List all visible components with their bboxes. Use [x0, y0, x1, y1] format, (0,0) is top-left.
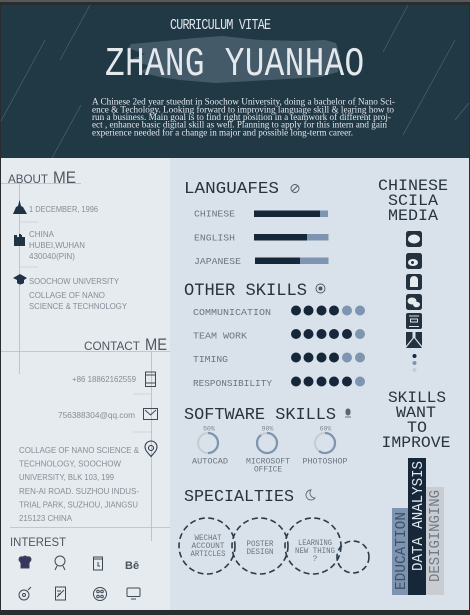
heading: languages: LANGUAFES [184, 180, 279, 199]
contact details: 756388304@qq.com [58, 410, 135, 420]
about me details: HUBEI,WUHAN [29, 240, 85, 250]
language labels [194, 208, 241, 267]
icon: film reel [94, 588, 106, 600]
about me details: COLLAGE OF NANO [29, 290, 105, 300]
percent labels: 90% [262, 426, 273, 432]
language labels: JAPANESE [194, 256, 241, 267]
percent labels: 50% [203, 426, 215, 432]
section: skills want to improve [382, 389, 450, 595]
software labels: OFFICE [254, 464, 282, 474]
heading: interest: INTEREST [10, 537, 66, 549]
bar: data analysis: DATA ANALYSIS [410, 461, 427, 571]
section: chinese social media [378, 177, 448, 372]
icon: momo [406, 231, 422, 247]
heading: chinese social media: SCILA [388, 192, 438, 210]
icon: renren [406, 332, 422, 348]
icon: qq penguin [406, 274, 422, 290]
heading: about me: ABOUT [8, 172, 49, 186]
icon: douban [406, 313, 422, 329]
icon: graduation cap [13, 274, 27, 284]
subtitle: CURRICULUM VITAE [170, 18, 271, 35]
contact details: REN-AI ROAD. SUZHOU INDUS- [19, 486, 139, 496]
icon: location pin [145, 441, 157, 456]
panel: right content [170, 158, 469, 610]
skill labels: COMMUNICATION [193, 307, 271, 318]
icon: document pen [56, 587, 66, 600]
specialty labels: WECHAT [194, 534, 222, 543]
icon: tablet [146, 372, 156, 386]
heading: skills want to improve: SKILLS [388, 389, 446, 407]
about me details: SOOCHOW UNIVERSITY [29, 276, 119, 286]
heading: software skills: SOFTWARE SKILLS [184, 406, 336, 425]
specialty labels: ? [313, 555, 318, 564]
specialty labels: LEARNING [298, 539, 332, 548]
contact details: TRIAL PARK, SUZHOU, JIANGSU [19, 500, 138, 510]
specialty labels [190, 534, 335, 564]
icon: chef hat [19, 556, 31, 568]
language labels: CHINESE [194, 208, 235, 220]
pagination dots [412, 354, 416, 372]
specialty labels: DESIGN [246, 548, 274, 557]
skill labels [193, 307, 272, 389]
section: languages [184, 180, 328, 267]
skill labels: TEAM WORK [193, 330, 247, 342]
heading: about me: ME [53, 168, 76, 187]
heading: contact me: CONTACT [84, 339, 141, 353]
about me details: 430040(PIN) [29, 251, 75, 261]
section: other skills [184, 281, 365, 389]
icon: medal [55, 556, 65, 570]
heading: specialties: SPECIALTIES [184, 488, 294, 507]
software labels [192, 456, 348, 474]
about me details: CHINA [29, 229, 54, 239]
language bars [254, 210, 328, 264]
summary paragraph: experience needed for a change in major and possible long-term career. [92, 128, 353, 138]
heading: other skills: OTHER SKILLS [184, 281, 307, 301]
progress rings [198, 433, 335, 453]
summary paragraph [92, 96, 395, 138]
summary paragraph: run a business. Main goal is to find right position in a teamwork of different proj- [92, 112, 391, 123]
heading: chinese social media: MEDIA [388, 207, 438, 225]
contact details [19, 375, 139, 523]
heading: skills want to improve: IMPROVE [382, 434, 450, 452]
about me details [29, 204, 127, 311]
icon: notebook [94, 557, 102, 570]
heading: skills want to improve: TO [407, 419, 427, 437]
summary paragraph: A Chinese 2ed year stuednt in Soochow University, doing a bachelor of Nano Sci- [92, 96, 395, 108]
specialty labels: NEW THING [295, 547, 335, 556]
percent labels [203, 426, 331, 432]
icon: target [316, 284, 325, 293]
specialty labels: POSTER [246, 540, 274, 549]
contact details: COLLAGE OF NANO SCIENCE & [19, 445, 139, 455]
icon: envelope [144, 408, 158, 420]
skill labels: TIMING [193, 354, 228, 365]
icon: weibo [406, 253, 422, 269]
contact details: UNIVERSITY, BLK 103, 199 [19, 472, 114, 482]
icon: monitor [127, 588, 140, 599]
heading: contact me: ME [145, 335, 167, 354]
skill labels: RESPONSIBILITY [193, 378, 272, 389]
icon: moon [306, 490, 315, 500]
specialty labels: ARTICLES [190, 550, 226, 559]
software labels: AUTOCAD [192, 456, 228, 466]
panel: left sidebar [1, 158, 170, 610]
icon: language badge [291, 184, 299, 192]
about me details: 1 DECEMBER, 1996 [29, 204, 98, 214]
heading: chinese social media: CHINESE [378, 177, 448, 195]
section: specialties [179, 488, 369, 574]
heading: about me [8, 168, 76, 187]
heading: chinese social media [378, 177, 448, 225]
icon: vinyl disc [19, 587, 31, 600]
dashed circles [179, 518, 369, 574]
language labels: ENGLISH [194, 232, 235, 244]
skill rating dots [291, 306, 365, 386]
specialty labels: ACCOUNT [192, 542, 225, 551]
interest icons [19, 556, 140, 600]
icon: birthday cake [13, 200, 27, 214]
bar: education: EDUCATION [394, 512, 410, 590]
icon: wechat [406, 294, 422, 310]
name title: ZHANG YUANHAO [105, 42, 364, 88]
contact details: +86 18862162559 [72, 375, 137, 384]
section: software skills [184, 406, 351, 474]
summary paragraph: ect , enhance basic digital skill as well. Planning to apply for this intern and gain [92, 120, 387, 131]
software labels: PHOTOSHOP [302, 456, 348, 466]
icon: city buildings [14, 234, 25, 246]
panel: header [1, 5, 469, 158]
icon: microphone [345, 409, 351, 417]
software labels: MICROSOFT [246, 456, 290, 466]
bar: designing: DESIGINGING [428, 490, 444, 582]
heading: contact me [84, 335, 167, 354]
brush stroke behind name [128, 36, 340, 83]
percent labels: 60% [320, 426, 331, 432]
heading: skills want to improve [382, 389, 450, 452]
contact details: TECHNOLOGY, SOOCHOW [19, 458, 121, 468]
about me details: SCIENCE & TECHNOLOGY [29, 301, 127, 311]
contact details: 215123 CHINA [19, 513, 72, 523]
heading: skills want to improve: WANT [396, 404, 436, 422]
icon: behance: Bē [125, 560, 139, 572]
summary paragraph: ence & Techology. Looking forward to improving language skill & learing how to [92, 104, 394, 115]
